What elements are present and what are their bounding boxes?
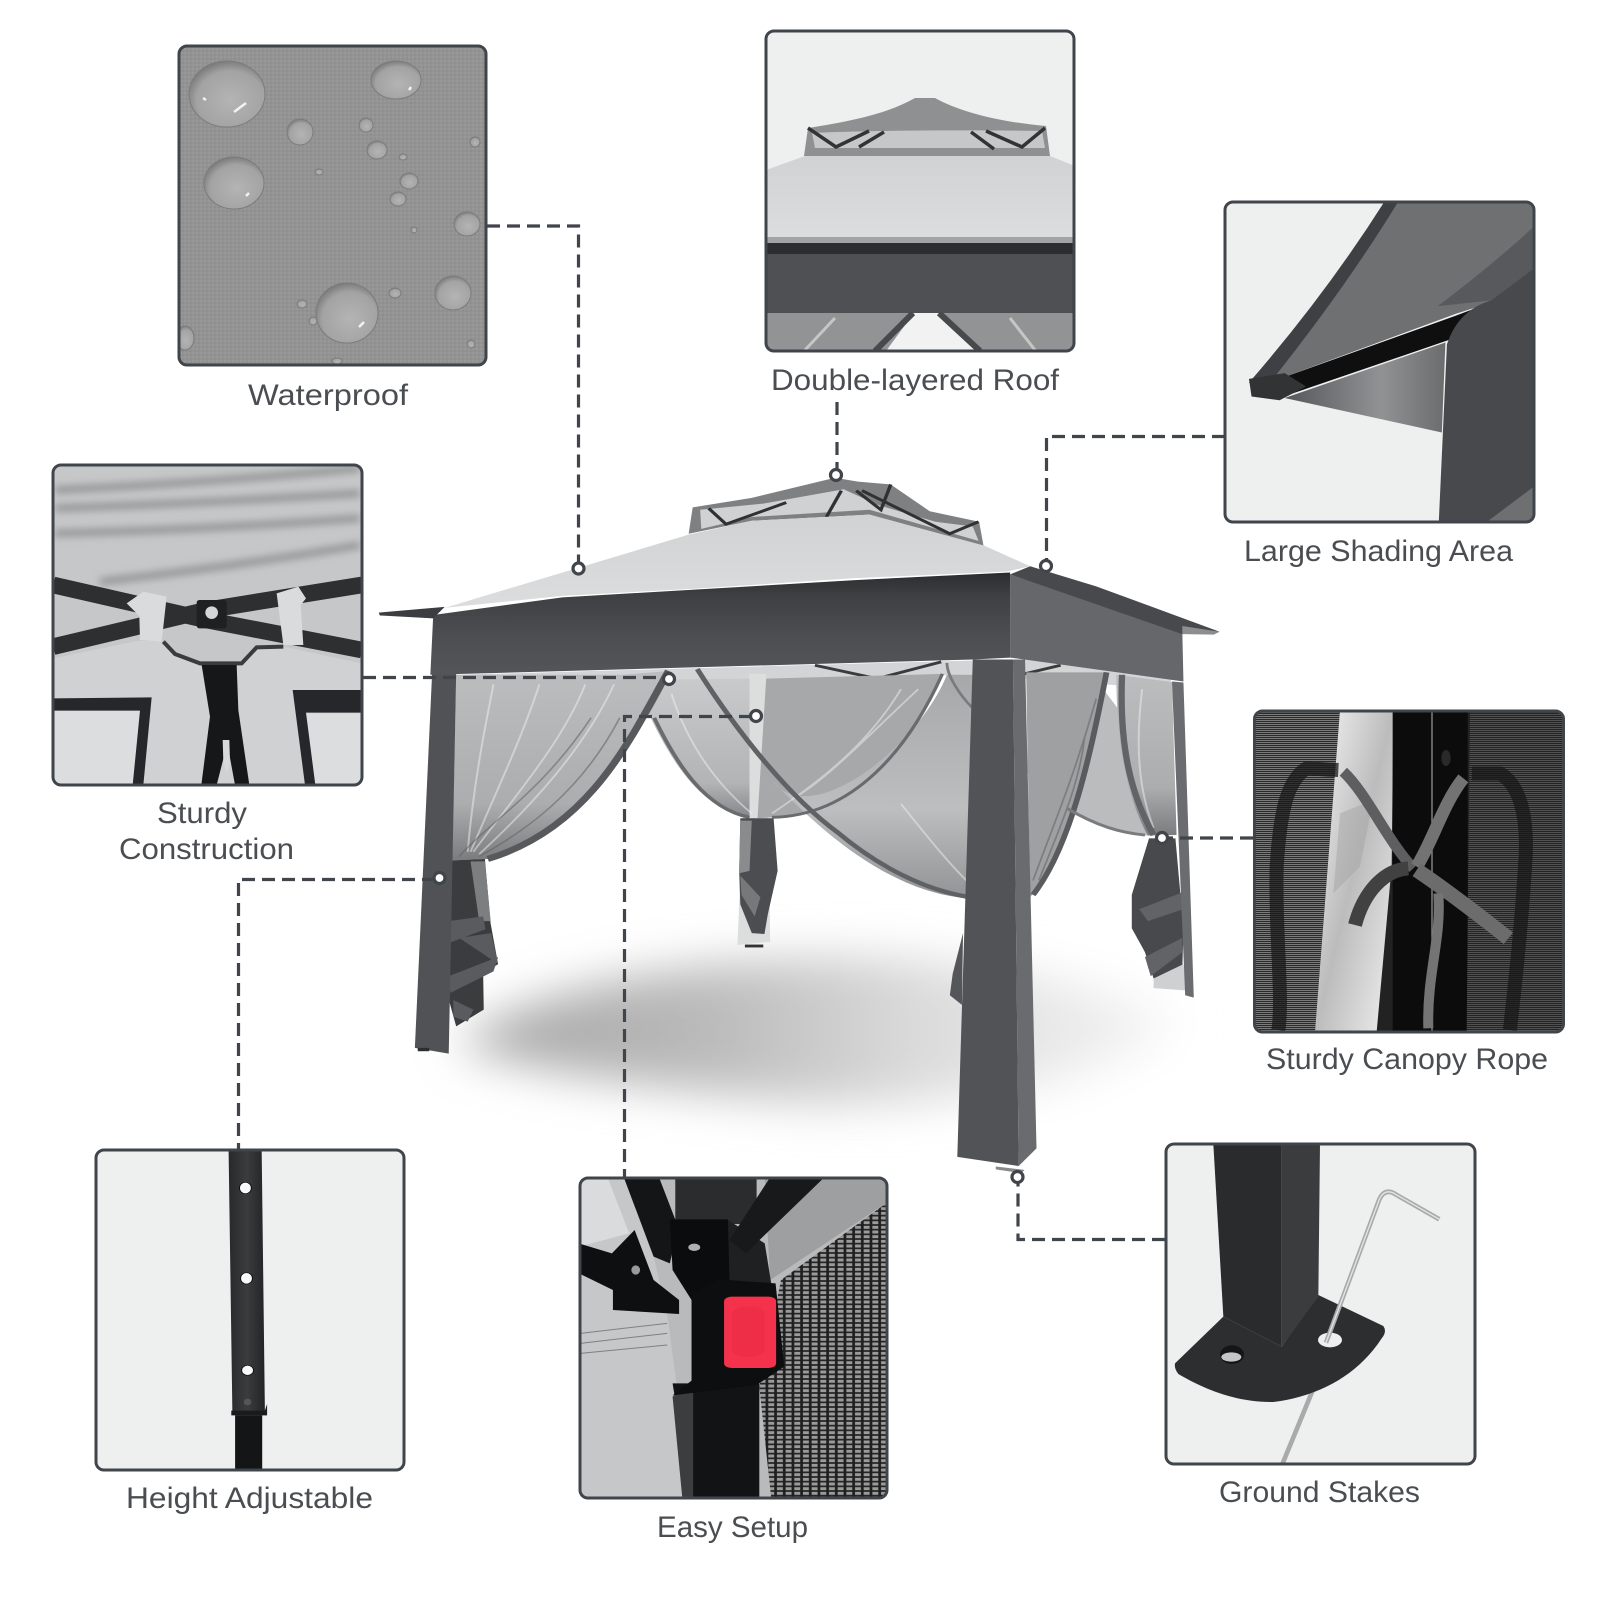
window left (53, 710, 140, 785)
dot: setup (750, 710, 762, 722)
right eave tip (1182, 626, 1220, 635)
gathered curtain: left (448, 859, 498, 1026)
mesh drape: front left (452, 671, 669, 860)
left mesh (1253, 710, 1340, 1032)
mesh drape: back right swag (1027, 675, 1148, 836)
dot: shading (1040, 560, 1052, 572)
label: Sturdy Construction (119, 797, 294, 866)
right eave (1010, 566, 1220, 634)
water droplets (176, 61, 480, 364)
label: Large Shading Area: Large Shading Area (1244, 535, 1513, 568)
canopy underside (1249, 202, 1535, 383)
connector: sturdy canopy rope (1167, 836, 1253, 840)
plate holes (1220, 1345, 1244, 1364)
drape highlights and edges (459, 663, 1154, 897)
gathered curtain: back (739, 818, 778, 934)
connector: double-layered roof (835, 402, 839, 470)
strap left (127, 592, 167, 642)
right mesh (1467, 710, 1564, 1032)
panel: ground stakes (1166, 1144, 1475, 1464)
connector: height adjustable (238, 880, 435, 1149)
label: Sturdy Construction: Construction (119, 833, 294, 866)
main roof (445, 515, 1030, 608)
upper canopy (689, 478, 984, 547)
pole joint (197, 600, 227, 628)
mesh drape: back centre (758, 674, 944, 818)
bar collar (231, 1404, 267, 1415)
mesh below valance (766, 313, 1074, 351)
dot: waterproof (573, 563, 584, 574)
stake upper section (1326, 1192, 1439, 1343)
upper canopy (804, 98, 1050, 156)
connector: waterproof (487, 226, 578, 564)
mesh drape: far right (1116, 675, 1177, 836)
mesh drape: right of front leg (1026, 672, 1108, 897)
square post (1213, 1144, 1282, 1347)
tent fabric (53, 641, 362, 785)
ground shadow (459, 957, 1177, 1104)
connector: large shading area (1046, 436, 1225, 561)
dot: stakes (1012, 1172, 1023, 1182)
connector: sturdy construction (363, 676, 664, 679)
right rear leg (1172, 681, 1194, 998)
black post (1393, 710, 1468, 1032)
anchor dots (434, 470, 1168, 1182)
top right fabric (765, 1177, 888, 1280)
corner tip (1249, 373, 1306, 400)
ribbon knot (1343, 772, 1508, 1028)
silver underside (1285, 343, 1445, 432)
main roof surface (766, 156, 1075, 237)
left bracket (579, 1230, 679, 1314)
panel: large shading area (1225, 202, 1535, 522)
connectors (238, 226, 1253, 1240)
left front leg (415, 673, 456, 1054)
label: Sturdy Construction: Sturdy (157, 797, 247, 830)
label: Double-layered Roof: Double-layered Roof (771, 364, 1060, 397)
red release button (724, 1297, 776, 1368)
adjustment holes (239, 1182, 254, 1375)
mesh loops (1276, 768, 1526, 1030)
gathered curtain: right (1132, 838, 1187, 990)
stake lower section (1283, 1377, 1318, 1463)
main product: gazebo (379, 478, 1220, 1173)
connector: ground stakes (1018, 1182, 1165, 1240)
label: Sturdy Canopy Rope: Sturdy Canopy Rope (1266, 1043, 1548, 1076)
left eave (379, 607, 445, 618)
valance bands (766, 237, 1074, 243)
upper beams (675, 1177, 757, 1224)
side wall (1439, 268, 1535, 522)
label: Waterproof: Waterproof (248, 379, 409, 412)
panel: easy setup (579, 1177, 888, 1498)
mesh (759, 1202, 888, 1498)
lower tube (235, 1415, 262, 1469)
panel: height adjustable (96, 1150, 404, 1470)
label: Height Adjustable: Height Adjustable (126, 1482, 373, 1515)
black strut (1288, 310, 1472, 394)
label: Ground Stakes: Ground Stakes (1219, 1476, 1420, 1509)
back leg and ceiling frame (456, 659, 1171, 947)
right front leg (957, 659, 1037, 1173)
dot: roof (830, 470, 842, 480)
mesh drape: back left (640, 679, 750, 817)
centre bracket (670, 1219, 729, 1320)
zipper (201, 665, 249, 785)
label: Easy Setup: Easy Setup (657, 1511, 808, 1544)
right valance (1010, 574, 1183, 681)
left fabric (582, 1180, 682, 1496)
dot: height (434, 872, 445, 884)
frame tube (673, 1383, 759, 1498)
front valance (430, 572, 1010, 675)
mesh drape: front large (772, 675, 973, 899)
dot: construction (664, 674, 674, 684)
fabric folds (55, 468, 360, 582)
dot: rope (1156, 832, 1168, 844)
crossing poles (53, 585, 362, 650)
panel: sturdy canopy rope (1253, 710, 1564, 1032)
connector: easy setup (624, 716, 752, 1177)
base plate (1175, 1295, 1385, 1402)
panel: double-layered roof (766, 31, 1075, 351)
curtain tail behind front right leg (950, 933, 963, 1005)
panel: waterproof (176, 46, 486, 365)
adjustable bar (229, 1150, 265, 1413)
release housing (673, 1279, 784, 1395)
window right (306, 713, 362, 785)
crinkled fabric (1315, 710, 1393, 1032)
strap right (277, 587, 306, 645)
panel: sturdy construction (52, 464, 363, 785)
